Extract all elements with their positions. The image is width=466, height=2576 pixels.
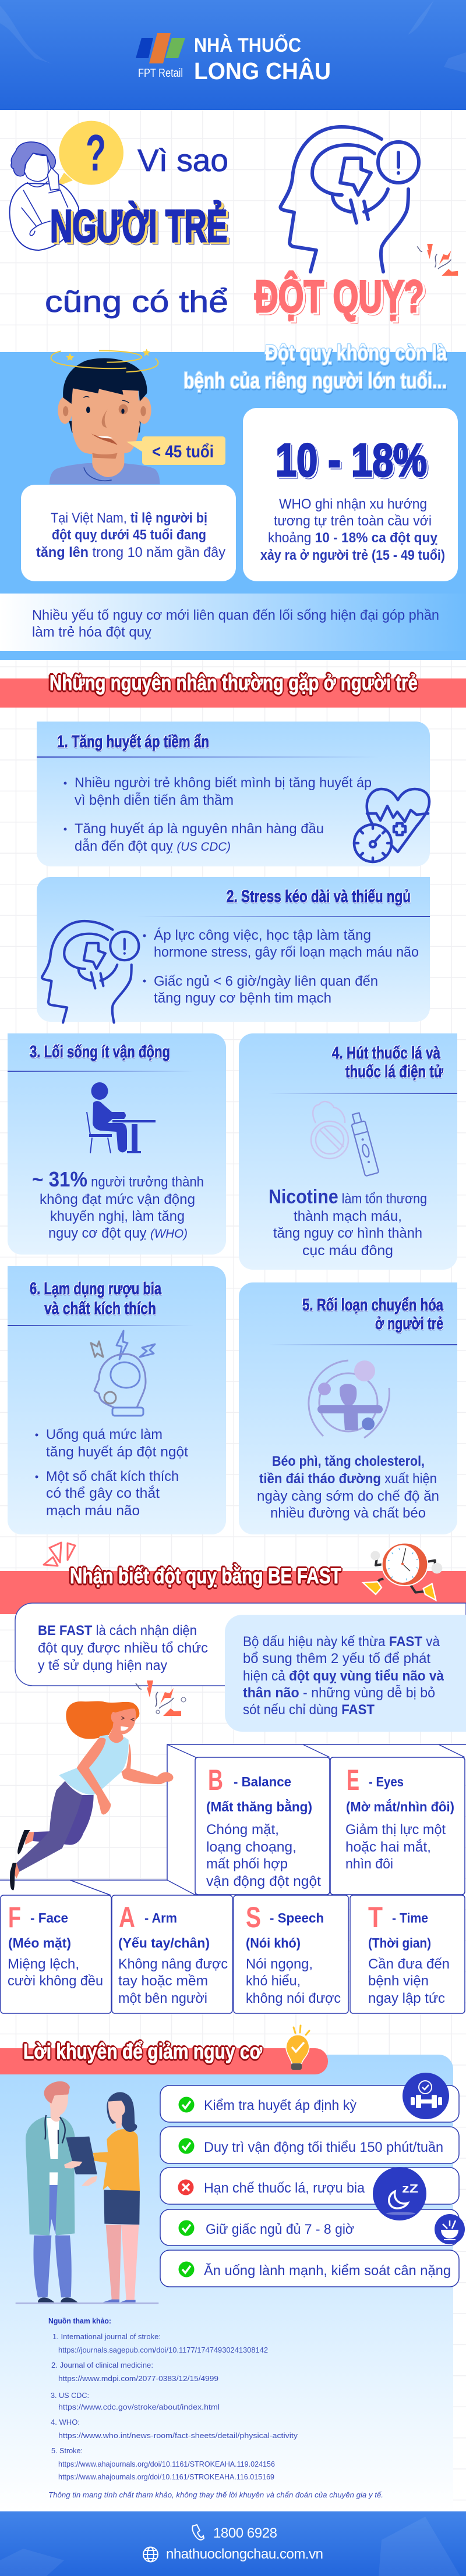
card 6: alcohol and stimulants: Uống quá mức làm [46,1427,163,1442]
panel: young people stroke stats [0,341,466,660]
card 5: metabolic disorders: nhiều đường và chất béo [270,1505,426,1521]
icon: alert rays [44,1543,75,1566]
box B: Balance: - Balance [234,1774,291,1789]
panel: FAST heritage note: Bộ dấu hiệu này kế thừa FAST và [243,1634,440,1650]
checklist row 3 [160,2168,459,2204]
box S: Speech: không nói được [246,1991,341,2006]
heading: NGƯỜI TRẺ [50,200,227,251]
card 3: sedentary lifestyle [8,1033,226,1255]
card 4: smoking: thành mạch máu, [294,1209,402,1224]
box T: Time: - Time [392,1910,428,1925]
references: https://www.who.int/news-room/fact-sheets/detail/physical-activity [58,2431,298,2440]
box E: Eyes: E [347,1764,359,1796]
heading: Vì sao [137,143,228,178]
icon: vape and no smoking [311,1102,379,1176]
card 3: sedentary lifestyle: 3. Lối sống ít vận động [30,1043,170,1061]
icon: stressed head [42,921,139,1022]
box F: Face: (Méo mặt) [8,1935,71,1950]
references: 3. US CDC: [51,2391,89,2400]
references: Nguồn tham khảo: [48,2316,111,2325]
card 6: alcohol and stimulants [8,1266,226,1534]
card 2: stress and sleep [37,877,430,1022]
header band [0,0,466,110]
icon: head with stress bolt [280,127,419,272]
box A: Arm: - Arm [144,1910,177,1925]
illustration: dizzy young man [50,349,160,484]
box S: Speech: S [246,1901,261,1934]
card 1: hypertension: 1. Tăng huyết áp tiềm ẩn [57,733,209,751]
card 5: metabolic disorders: ngày càng sớm do chế độ ăn [257,1488,439,1504]
card 2: stress and sleep: 2. Stress kéo dài và thiếu ngủ [227,887,411,906]
card: Vietnam statistic: tăng lên trong 10 năm gần đây [36,545,225,560]
box B: Balance: (Mất thăng bằng) [206,1799,312,1814]
callout: under 45: < 45 tuổi [152,442,214,461]
card 6: alcohol and stimulants: Một số chất kích thích [46,1469,179,1484]
box: BE FAST explanation [15,1603,466,1686]
box F: Face: Miệng lệch, [8,1956,79,1972]
box B: Balance: vận động đột ngột [206,1874,321,1889]
section heading: advice: Lời khuyên để giảm nguy cơ [23,2040,263,2063]
section heading: BE FAST: Nhận biết đột quỵ bằng BE FAST [70,1564,341,1588]
icon: brain head with bolts [91,1331,155,1416]
panel: FAST heritage note [225,1615,466,1732]
box B: Balance: loạng choạng, [206,1839,296,1855]
logo: FPT Retail mark [136,33,185,80]
card 6: alcohol and stimulants: và chất kích thích [44,1299,156,1318]
box E: Eyes: - Eyes [369,1774,404,1789]
illustration: running clock [363,1543,442,1600]
card: WHO statistic: khoảng 10 - 18% ca đột quỵ [268,530,438,546]
box B: Balance: B [208,1764,223,1796]
icon: sleep moon badge [373,2167,426,2220]
card 6: alcohol and stimulants: tăng huyết áp đột ngột [46,1444,188,1460]
references: 1. International journal of stroke: [52,2332,161,2341]
box A: Arm: tay hoặc mềm [118,1973,208,1989]
card 2: stress and sleep: tăng nguy cơ bệnh tim mạch [154,990,331,1006]
card 6: alcohol and stimulants: 6. Lạm dụng rượu bia [30,1280,162,1298]
section heading: advice [0,2040,328,2074]
card 3: sedentary lifestyle: nguy cơ đột quỵ (WHO) [48,1225,188,1241]
box T: Time: (Thời gian) [368,1935,431,1950]
card: WHO statistic: tương tự trên toàn cầu với [274,513,432,529]
box: BE FAST explanation: BE FAST là cách nhận diện [38,1623,197,1639]
card 1: hypertension: vì bệnh diễn tiến âm thầm [75,793,234,808]
box S: Speech: khó hiểu, [246,1973,301,1989]
checklist row 5: Ăn uống lành mạnh, kiểm soát cân nặng [204,2263,451,2279]
box A: Arm [112,1895,232,2013]
icon: red sparks [136,1680,186,1716]
section heading: BE FAST [0,1543,466,1614]
card 4: smoking: Nicotine làm tổn thương [269,1186,427,1208]
checklist row 5 [160,2250,459,2287]
box E: Eyes [330,1757,465,1895]
references: https://www.cdc.gov/stroke/about/index.html [58,2403,220,2411]
icon: light bulb [286,2026,309,2070]
references: https://www.ahajournals.org/doi/10.1161/STROKEAHA.116.015169 [58,2472,274,2481]
references: https://www.mdpi.com/2077-0383/12/15/4999 [58,2374,218,2383]
box: BE FAST explanation: đột quỵ được nhiều tổ chức [38,1640,208,1656]
panel: advice background [0,2055,453,2511]
icon: healthy food badge [435,2214,465,2244]
icon: dumbbell badge [403,2073,449,2119]
illustration: doctor and patient [16,2081,158,2304]
box T: Time: T [368,1901,383,1934]
card 6: alcohol and stimulants: mạch máu não [46,1503,140,1519]
panel: FAST heritage note: bổ sung thêm 2 yếu tố để phát [243,1651,430,1667]
phone number: 1800 6928 [213,2525,277,2541]
brand name [194,34,331,84]
icon: metabolism cycle [309,1360,389,1438]
references: https://journals.sagepub.com/doi/10.1177/17474930241308142 [58,2346,268,2354]
icon: sleep moon badge: zZ [402,2183,418,2195]
logo: FPT Retail mark: FPT Retail [138,67,183,80]
card: WHO statistic [243,408,458,581]
card 4: smoking: cục máu đông [302,1243,393,1259]
card 2: stress and sleep: Giấc ngủ < 6 giờ/ngày liên quan đến [154,973,378,989]
box A: Arm: Không nâng được [118,1956,228,1972]
icon: globe [143,2547,158,2561]
checklist row 2 [160,2127,459,2163]
box F: Face: - Face [30,1910,68,1925]
card 3: sedentary lifestyle: khuyến nghị, làm tăng [50,1209,185,1224]
box S: Speech [234,1895,348,2013]
card: WHO statistic: xảy ra ở người trẻ (15 - 49 tuổi) [260,548,445,563]
card 1: hypertension: Tăng huyết áp là nguyên nhân hàng đầu [75,821,324,837]
band: modern lifestyle note: làm trẻ hóa đột quỵ [32,624,151,640]
band: modern lifestyle note: Nhiều yếu tố nguy cơ mới liên quan đến lối sống hiện đại góp phần [32,607,439,623]
box T: Time: Cần đưa đến [368,1956,450,1972]
illustration: woman losing balance [10,1701,174,1890]
references: https://www.ahajournals.org/doi/10.1161/STROKEAHA.119.024156 [58,2460,275,2468]
card: WHO statistic: WHO ghi nhận xu hướng [279,496,427,512]
card 1: hypertension [37,722,430,866]
box A: Arm: một bên người [118,1991,207,2006]
checklist row 1 [160,2085,459,2122]
card 6: alcohol and stimulants: có thể gây co thắt [46,1486,160,1501]
box F: Face: cười không đều [8,1973,103,1989]
icon: heart and gauge [354,789,429,862]
website: nhathuoclongchau.com.vn [166,2546,323,2562]
references: 4. WHO: [51,2418,80,2426]
card 3: sedentary lifestyle: ~ 31% người trưởng thành [32,1167,204,1191]
box S: Speech: - Speech [270,1910,324,1925]
icon: person sitting at desk [87,1082,156,1153]
footer [0,2511,466,2576]
box E: Eyes: (Mờ mắt/nhìn đôi) [346,1799,454,1814]
card: WHO statistic: 10 - 18% [276,434,427,486]
section heading: causes [0,671,466,708]
3D box outlines [0,1744,466,1895]
box B: Balance [195,1757,330,1895]
card 1: hypertension: Nhiều người trẻ không biết mình bị tăng huyết áp [75,775,372,791]
title illustration: worried girl with question bubble [9,121,123,250]
box A: Arm: A [119,1901,135,1934]
card 3: sedentary lifestyle: không đạt mức vận động [40,1192,195,1207]
brand name: NHÀ THUỐC [194,34,301,56]
panel: FAST heritage note: hiện cả đột quỵ vùng tiểu não và [243,1668,444,1684]
references: 5. Stroke: [51,2446,83,2455]
checklist row 4: Giữ giấc ngủ đủ 7 - 8 giờ [206,2222,354,2237]
card 5: metabolic disorders: ở người trẻ [375,1314,443,1333]
checklist row 1: Kiểm tra huyết áp định kỳ [204,2098,356,2113]
question mark: ? [86,124,106,182]
card: Vietnam statistic: đột quỵ dưới 45 tuổi đang [52,527,206,543]
band: modern lifestyle note [0,594,466,651]
card 5: metabolic disorders: Béo phì, tăng cholesterol, [272,1454,425,1469]
card 5: metabolic disorders: tiền đái tháo đường xuất hiện [259,1471,437,1487]
panel: FAST heritage note: thân não - những vùng dễ bị bỏ [243,1685,435,1701]
box F: Face: F [8,1901,21,1934]
subheading [183,341,447,393]
box F: Face [1,1895,111,2013]
card 5: metabolic disorders [239,1282,457,1534]
heading [45,143,424,322]
brand name: LONG CHÂU [194,58,331,84]
card 4: smoking [239,1033,457,1270]
card 4: smoking: tăng nguy cơ hình thành [273,1225,422,1241]
references [48,2316,383,2499]
box A: Arm: (Yếu tay/chân) [118,1935,210,1950]
card 2: stress and sleep: hormone stress, gây rối loạn mạch máu não [154,944,419,960]
card: Vietnam statistic [21,485,236,581]
icon: phone [192,2525,204,2540]
box E: Eyes: Giảm thị lực một [345,1822,446,1838]
card 1: hypertension: dẫn đến đột quỵ (US CDC) [75,838,231,854]
references: Thông tin mang tính chất tham khảo, không thay thế lời khuyên và chẩn đoán của chuyên gia y tế. [48,2490,383,2499]
box B: Balance: Chóng mặt, [206,1822,279,1838]
box T: Time: bệnh viện [368,1973,429,1989]
box T: Time: ngay lập tức [368,1991,445,2006]
checklist row 4 [160,2209,459,2245]
box E: Eyes: hoặc hai mắt, [345,1839,431,1855]
callout: under 45 [126,436,225,465]
box B: Balance: mất phối hợp [206,1856,288,1872]
box T: Time [350,1895,465,2013]
box S: Speech: (Nói khó) [246,1935,301,1950]
card: Vietnam statistic: Tại Việt Nam, tỉ lệ người bị [51,510,207,526]
panel: FAST heritage note: sót nếu chỉ dùng FAST [243,1702,375,1718]
box E: Eyes: nhìn đôi [345,1856,393,1872]
box: BE FAST explanation: y tế sử dụng hiện nay [38,1658,167,1673]
heading: cũng có thể [45,285,228,319]
card 2: stress and sleep: Áp lực công việc, học tập làm tăng [154,928,371,943]
checklist row 3: Hạn chế thuốc lá, rượu bia [204,2180,365,2196]
checklist row 2: Duy trì vận động tối thiểu 150 phút/tuần [204,2140,443,2155]
icon: red sparks top [417,244,458,276]
references: 2. Journal of clinical medicine: [51,2361,153,2369]
box S: Speech: Nói ngọng, [246,1956,313,1972]
